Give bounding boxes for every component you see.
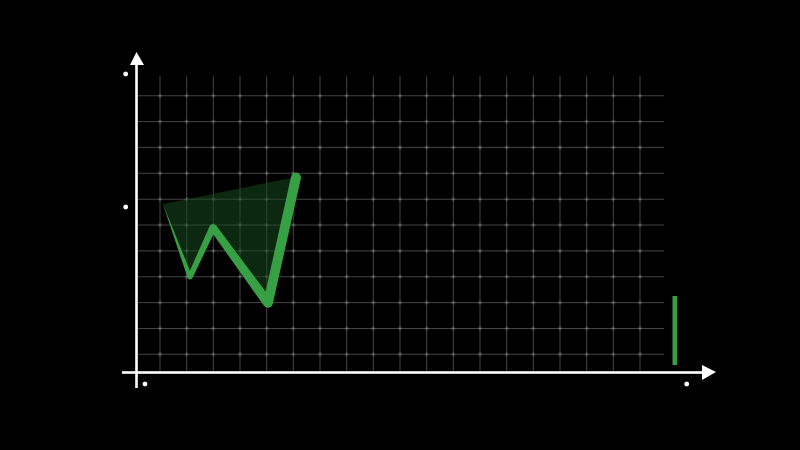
x axis arrow	[122, 365, 716, 380]
grid	[138, 76, 664, 372]
y axis arrow	[130, 52, 144, 388]
area fill under line	[163, 177, 296, 303]
green progress bar	[672, 296, 677, 365]
green tapered line	[163, 172, 301, 308]
axis tick dots	[123, 72, 689, 386]
